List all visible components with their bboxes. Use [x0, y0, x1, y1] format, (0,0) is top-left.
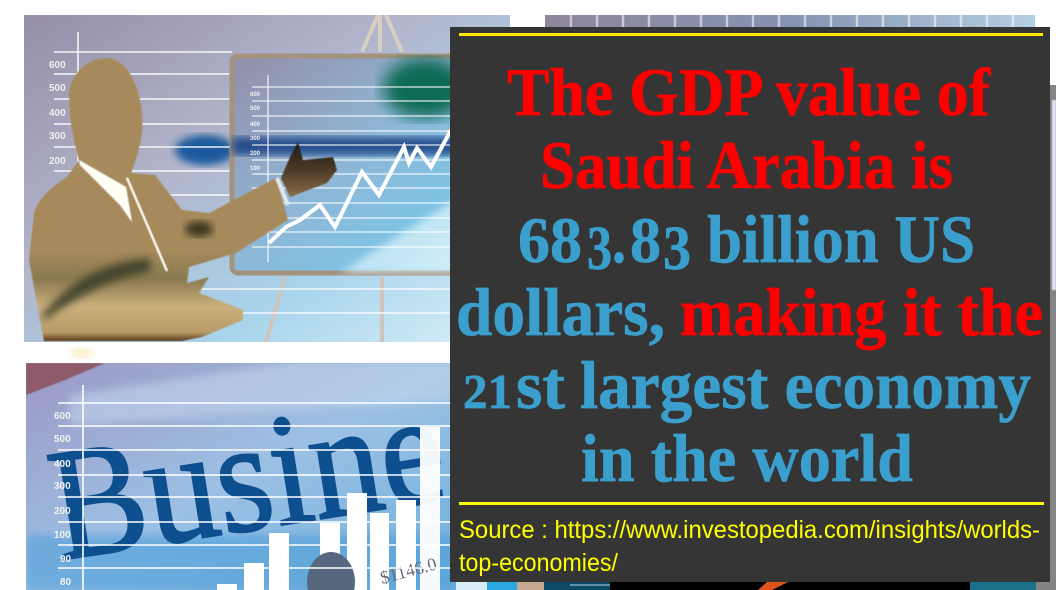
photo: presenter with chart board: 500 [49, 83, 66, 94]
photo: presenter with chart board: 400 [49, 108, 66, 119]
panel: GDP callout [450, 27, 1050, 582]
photo: business newspaper bars: 300 [54, 481, 71, 492]
headline text: making it the [680, 274, 1043, 350]
headline text: Saudi Arabia is [540, 127, 953, 203]
business headline: Busine [38, 357, 456, 590]
photo: business newspaper bars: 80 [60, 577, 72, 588]
photo: business newspaper bars: 90 [60, 554, 72, 565]
source citation: Source : https://www.investopedia.com/insights/worlds- [459, 516, 1040, 544]
headline text: 68 [518, 205, 582, 277]
headline text: in the world [581, 420, 913, 496]
photo: business newspaper bars: 600 [54, 411, 71, 422]
presenter silhouette [29, 58, 337, 341]
headline text: 21 [463, 364, 512, 419]
bottom right photo fragment [456, 580, 1056, 590]
headline text: . [612, 205, 626, 277]
chart board: 200 [250, 151, 261, 157]
chart board: 500 [250, 106, 261, 112]
photo: business newspaper bars: 100 [54, 530, 71, 541]
photo: business newspaper bars: 500 [54, 434, 71, 445]
headline text: 3 [587, 215, 612, 283]
photo: presenter with chart board: 200 [49, 156, 66, 167]
photo: presenter with chart board [24, 15, 510, 342]
source citation: top-economies/ [459, 549, 618, 577]
chart board: 100 [250, 166, 261, 172]
headline text: billion US [707, 201, 975, 277]
photo: presenter with chart board: 300 [49, 131, 66, 142]
headline text [456, 54, 1043, 496]
photo: business newspaper bars: 200 [54, 506, 71, 517]
headline text: st [516, 347, 565, 423]
source citation [459, 516, 1040, 577]
chart board: 300 [250, 136, 261, 142]
presenter hand [281, 142, 337, 197]
headline text: The GDP value of [507, 54, 991, 130]
right edge photo fragment [1050, 85, 1056, 590]
photo: business newspaper bars: $1146.0 [378, 554, 439, 588]
chart board: 400 [250, 122, 261, 128]
headline text: dollars, [456, 274, 665, 350]
headline text: 3 [663, 215, 691, 283]
chart board: 600 [250, 92, 261, 98]
colour tile strip [545, 15, 1035, 29]
headline text: largest economy [580, 347, 1031, 423]
photo: business newspaper bars: 400 [54, 459, 71, 470]
headline text: 8 [630, 205, 661, 277]
photo: presenter with chart board: 600 [49, 60, 66, 71]
chart board [230, 54, 450, 276]
photo: business newspaper bars [26, 357, 456, 590]
